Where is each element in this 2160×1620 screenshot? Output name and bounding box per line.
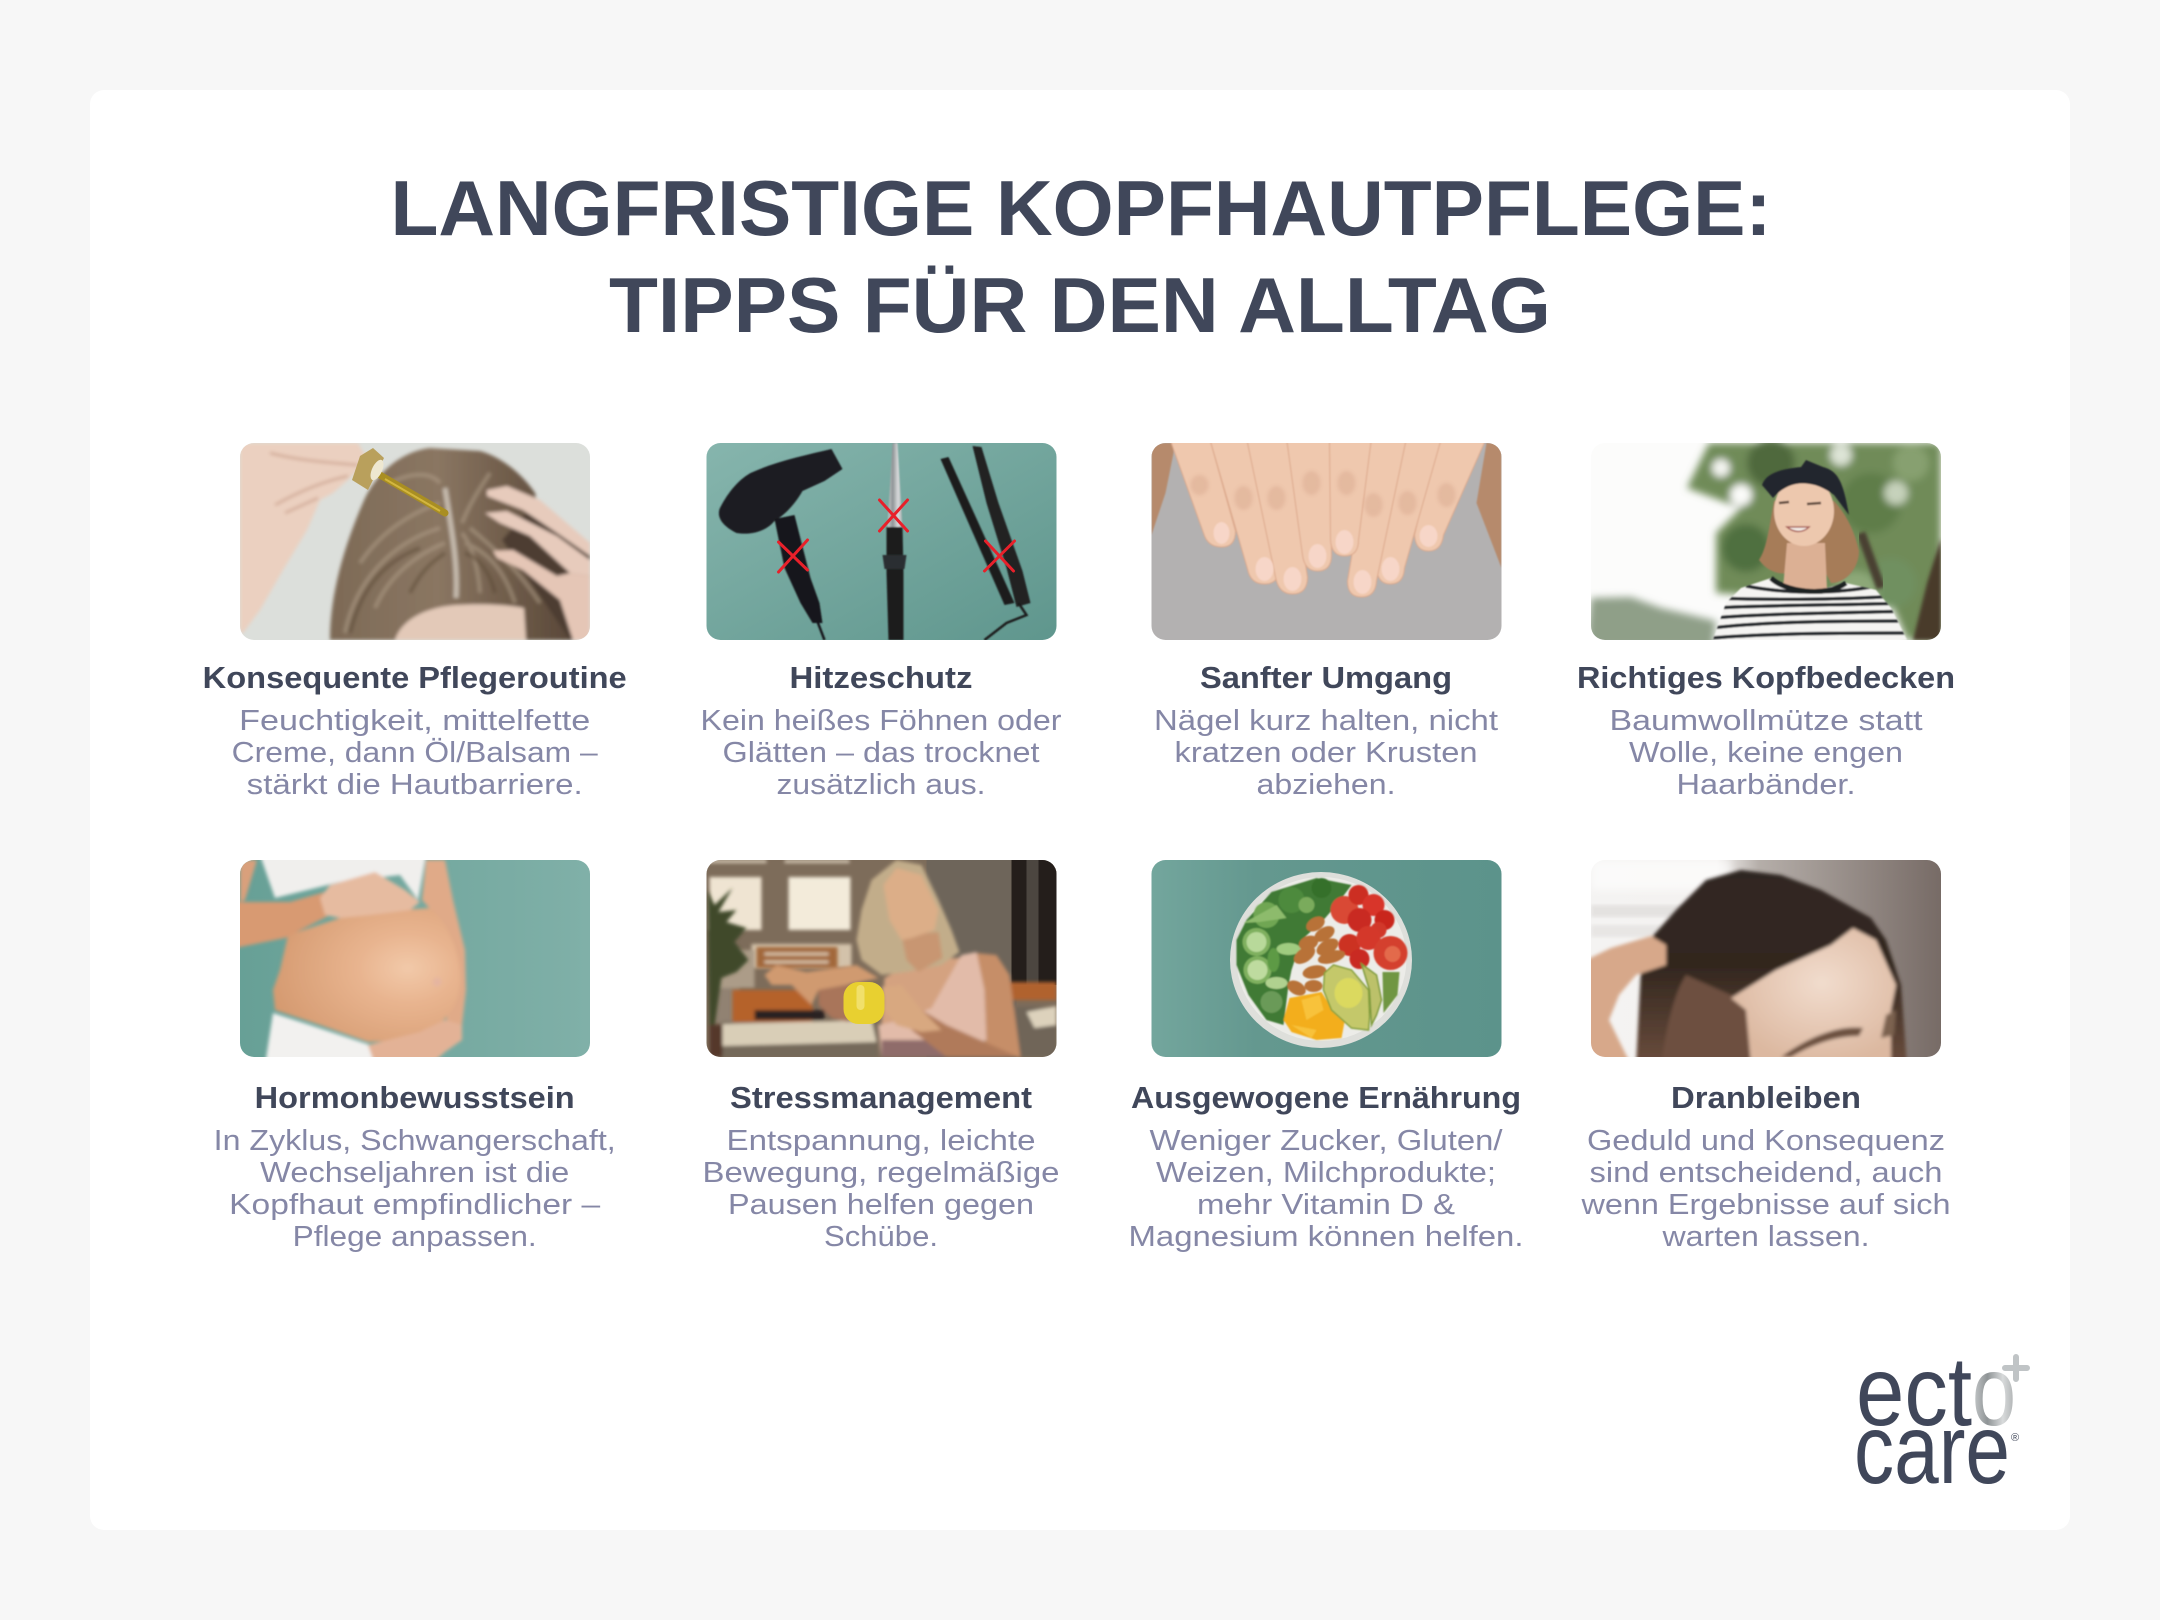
- body text: Wechseljahren ist die: [260, 1157, 569, 1189]
- body text: Entspannung, leichte: [726, 1125, 1036, 1157]
- body text: mehr Vitamin D &: [1197, 1189, 1455, 1221]
- body text: [232, 705, 599, 801]
- body text: Glätten – das trocknet: [722, 737, 1040, 769]
- photo: pregnant belly: [240, 860, 590, 1057]
- body text: [700, 705, 1062, 801]
- body text: Weniger Zucker, Gluten/: [1150, 1125, 1504, 1157]
- heading: Hormonbewusstsein: [255, 1080, 575, 1115]
- panel: Sanfter Umgang: [1152, 438, 1502, 801]
- panel: Dranbleiben: [1580, 860, 1950, 1253]
- body text: [1128, 1125, 1524, 1253]
- heading: Ausgewogene Ernährung: [1131, 1080, 1521, 1115]
- panel: Ausgewogene Ernährung: [1128, 860, 1524, 1253]
- logo: ecto care: ect: [1856, 1336, 1972, 1446]
- panel: Hitzeschutz: [700, 443, 1062, 801]
- title: LANGFRISTIGE KOPFHAUTPFLEGE:: [390, 164, 1772, 252]
- body text: Creme, dann Öl/Balsam –: [232, 737, 599, 769]
- photo: hands with short nails: [1152, 443, 1502, 640]
- body text: Kopfhaut empfindlicher –: [229, 1189, 601, 1221]
- photo: salad bowl: [1152, 860, 1502, 1057]
- panel: Konsequente Pflegeroutine: [203, 443, 627, 801]
- body text: In Zyklus, Schwangerschaft,: [214, 1125, 616, 1157]
- panel: Stressmanagement: [702, 860, 1060, 1253]
- title: TIPPS FÜR DEN ALLTAG: [609, 261, 1551, 349]
- photo: relaxed woman with yellow mug: [706, 860, 1056, 1057]
- logo: ecto care: ®: [2011, 1432, 2019, 1444]
- body text: [214, 1125, 616, 1253]
- heading: Konsequente Pflegeroutine: [203, 660, 627, 695]
- body text: Pausen helfen gegen: [728, 1189, 1034, 1221]
- body text: Nägel kurz halten, nicht: [1154, 705, 1498, 737]
- photo: hair dryer, curling iron, straightener crossed out: [706, 443, 1056, 640]
- body text: [1610, 705, 1922, 801]
- body text: wenn Ergebnisse auf sich: [1580, 1189, 1950, 1221]
- heading: Richtiges Kopfbedecken: [1577, 660, 1955, 695]
- heading: Sanfter Umgang: [1200, 660, 1452, 695]
- body text: [1154, 705, 1498, 801]
- photo: woman with cap outdoors: [1591, 443, 1941, 640]
- body text: Bewegung, regelmäßige: [702, 1157, 1060, 1189]
- body text: Magnesium können helfen.: [1128, 1221, 1524, 1253]
- body text: Schübe.: [824, 1221, 938, 1253]
- body text: warten lassen.: [1661, 1221, 1870, 1253]
- logo: ecto care: o: [1972, 1336, 2016, 1446]
- body text: Baumwollmütze statt: [1610, 705, 1922, 737]
- body text: [702, 1125, 1060, 1253]
- body text: Weizen, Milchprodukte;: [1156, 1157, 1496, 1189]
- photo: woman's hairline with hand: [1591, 860, 1941, 1057]
- heading: Dranbleiben: [1671, 1080, 1861, 1115]
- logo: ecto care: care: [1854, 1394, 2010, 1504]
- title: [390, 164, 1772, 349]
- body text: zusätzlich aus.: [776, 769, 986, 801]
- body text: [1580, 1125, 1950, 1253]
- panel: Richtiges Kopfbedecken: [1577, 439, 1955, 801]
- heading: Stressmanagement: [730, 1080, 1032, 1115]
- logo: ecto care: [1854, 1336, 2027, 1504]
- body text: Haarbänder.: [1676, 769, 1856, 801]
- body text: abziehen.: [1256, 769, 1396, 801]
- heading: Hitzeschutz: [790, 660, 972, 695]
- panel: Hormonbewusstsein: [214, 855, 616, 1253]
- body text: Geduld und Konsequenz: [1587, 1125, 1945, 1157]
- body text: Kein heißes Föhnen oder: [700, 705, 1062, 737]
- body text: Pflege anpassen.: [293, 1221, 537, 1253]
- body text: Wolle, keine engen: [1629, 737, 1903, 769]
- body text: Feuchtigkeit, mittelfette: [239, 705, 590, 737]
- body text: stärkt die Hautbarriere.: [247, 769, 583, 801]
- body text: sind entscheidend, auch: [1590, 1157, 1942, 1189]
- body text: kratzen oder Krusten: [1174, 737, 1478, 769]
- photo: oil dropper on hair parting: [240, 443, 590, 640]
